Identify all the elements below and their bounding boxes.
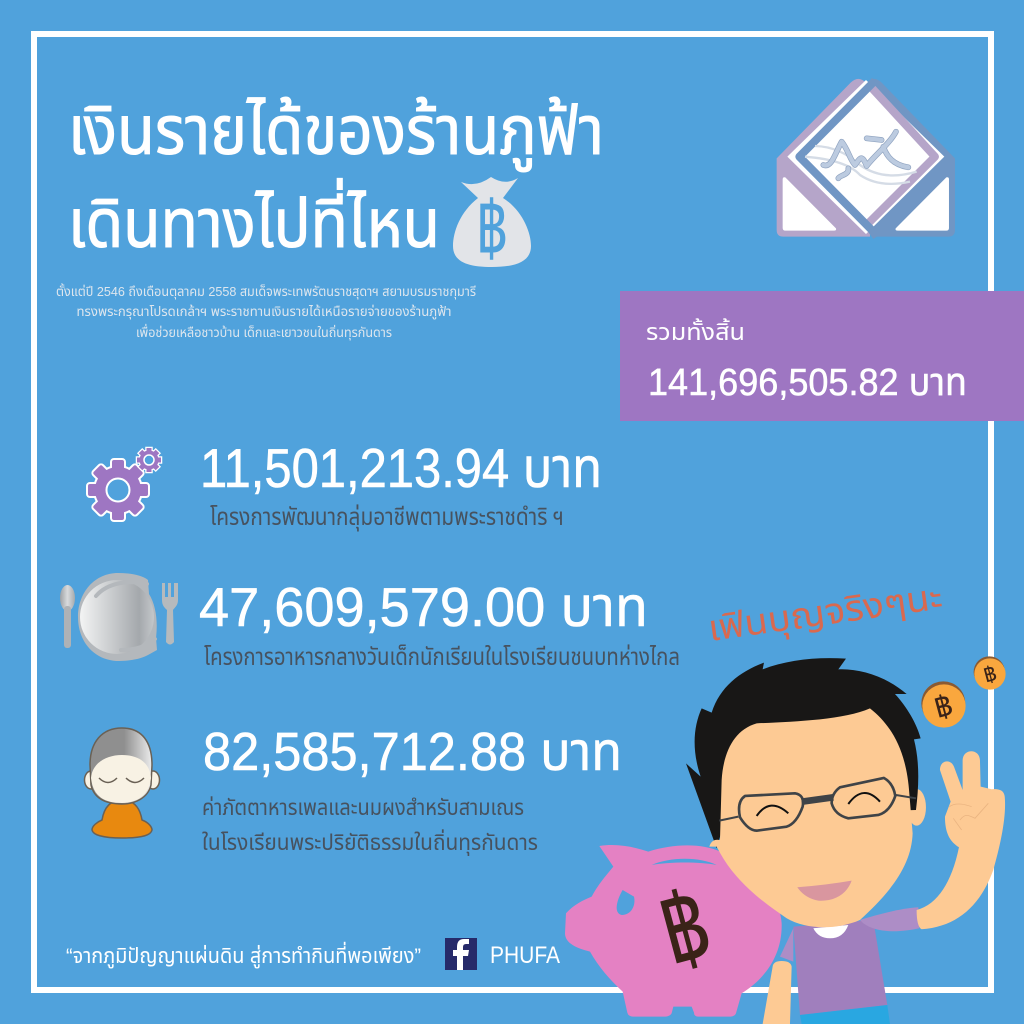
coins [921,656,1006,728]
icon: facebook [445,938,477,970]
icon: gears [88,448,161,520]
facebook name: PHUFA [490,942,560,969]
intro text: ตั้งแต่ปี 2546 ถึงเดือนตุลาคม 2558 สมเด็จพระเทพรัตนราชสุดาฯ สยามบรมราชกุมารี [56,283,476,299]
intro text: ทรงพระกรุณาโปรดเกล้าฯ พระราชทานเงินรายได้เหนือรายจ่ายของร้านภูฟ้า [76,304,452,319]
panel: total: รวมทั้งสิ้น [646,317,745,345]
title [68,93,604,262]
ears [907,789,926,826]
amount 1: โครงการพัฒนากลุ่มอาชีพตามพระราชดำริ ฯ [210,503,564,532]
title: เงินรายได้ของร้านภูฟ้า [68,93,604,172]
amount 3 [202,722,622,856]
icon: plate and cutlery [60,573,178,661]
amount 1: 11,501,213.94 บาท [200,437,602,499]
illustration: man with piggy bank [565,656,1006,1024]
icon: money bag: ฿ [476,187,508,272]
panel: total: 141,696,505.82 บาท [648,362,967,404]
coins: ฿ [981,661,1000,688]
amount 2: โครงการอาหารกลางวันเด็กนักเรียนในโรงเรียนชนบทห่างไกล [204,643,680,671]
raised arm and hand [917,751,1005,929]
face [709,708,913,927]
footer slogan: “จากภูมิปัญญาแผ่นดิน สู่การทำกินที่พอเพียง” [66,941,421,969]
amount 2: 47,609,579.00 บาท [199,576,648,638]
handwritten note: เฟินบุญจริงๆนะ [705,575,945,650]
logo [777,79,955,237]
amount 3: 82,585,712.88 บาท [203,722,622,782]
piggy bank: ฿ [648,870,722,990]
icon: novice monk [84,728,160,838]
hair [686,658,921,848]
amount 3: ค่าภัตตาหารเพลและนมผงสำหรับสามเณร [202,795,524,820]
coins: ฿ [931,689,957,726]
intro text [56,283,476,340]
glasses [719,778,916,831]
amount 1 [200,437,602,532]
body [763,907,919,1024]
piggy bank [565,845,782,1017]
intro text: เพื่อช่วยเหลือชาวบ้าน เด็กและเยาวชนในถิ่นทุรกันดาร [136,323,392,340]
amount 3: ในโรงเรียนพระปริยัติธรรมในถิ่นทุรกันดาร [202,828,538,856]
panel: total [620,291,1024,421]
title: เดินทางไปที่ไหน [68,178,440,262]
amount 2 [199,576,680,671]
icon: money bag [453,177,531,272]
mouth [797,881,852,901]
